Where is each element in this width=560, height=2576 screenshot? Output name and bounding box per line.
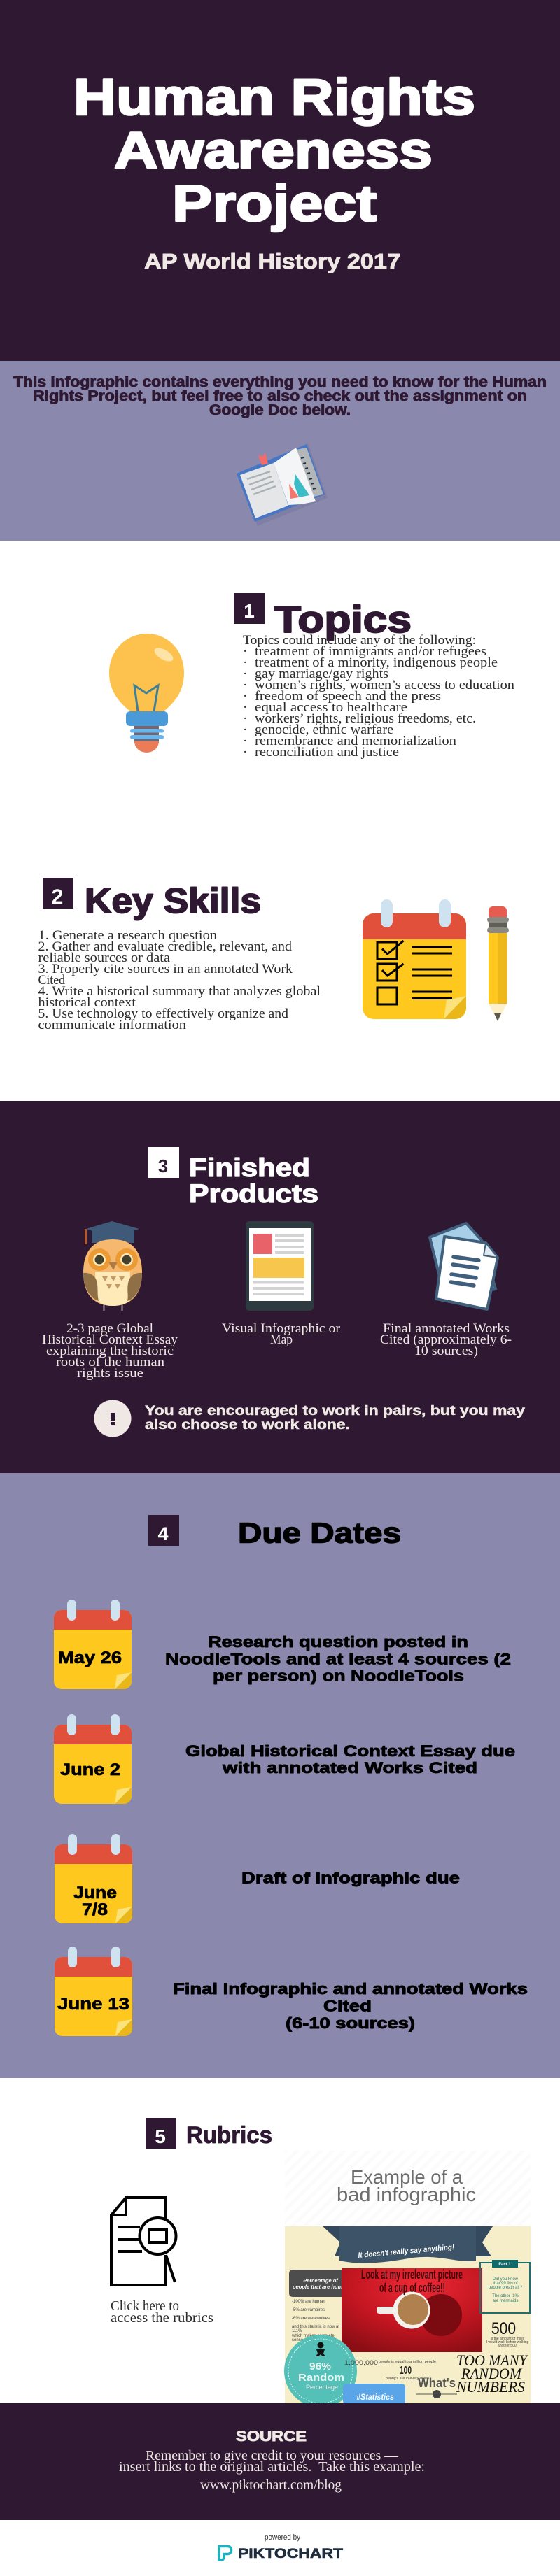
panel: due dates — [0, 1473, 560, 2078]
due item: research question: per person) on NoodleTools — [213, 1667, 464, 1684]
skills list: historical context — [38, 995, 136, 1010]
due item: draft: Draft of Infographic due — [241, 1869, 460, 1887]
topics list: genocide, ethnic warfare — [255, 723, 393, 737]
random numbers — [344, 2359, 457, 2398]
source text — [119, 2449, 425, 2493]
topics list: women’s rights, women’s access to education — [255, 678, 515, 692]
calendar: June 2: June 2 — [60, 1760, 120, 1779]
product captions: 10 sources) — [414, 1344, 478, 1358]
gray badge: people that are human — [292, 2284, 349, 2290]
calendar: June 7/8: June — [74, 1884, 117, 1902]
random numbers: penny's are in every dollar — [386, 2377, 429, 2381]
callout: pairs note: also choose to work alone. — [145, 1418, 350, 1432]
topics list: · — [243, 644, 247, 659]
heading: finished products: Products — [189, 1179, 318, 1208]
heading: finished products — [189, 1153, 318, 1208]
coffee photo — [342, 2268, 482, 2352]
icon: exclamation — [94, 1400, 132, 1437]
skills list: communicate information — [38, 1018, 187, 1032]
panel: introduction — [0, 361, 560, 541]
due item: context essay: with annotated Works Cited — [222, 1759, 477, 1777]
panel: key skills — [38, 878, 509, 1032]
skills list: reliable sources or data — [38, 951, 171, 965]
number badge 5 — [146, 2118, 176, 2149]
icon: owl with graduation cap — [83, 1221, 142, 1311]
number badge 5: 5 — [155, 2126, 166, 2147]
icon: open book — [237, 443, 328, 526]
skills list — [38, 928, 321, 1032]
number badge 2 — [43, 878, 74, 909]
stat 500: I would walk before walking — [486, 2340, 529, 2344]
example image: bad infographic: bad infographic — [337, 2184, 476, 2205]
too many random numbers: RANDOM — [461, 2365, 523, 2382]
fact box: Did you know — [493, 2277, 519, 2282]
heading: key skills: Key Skills — [85, 881, 261, 920]
topics list: · — [243, 689, 247, 704]
product captions: Map — [270, 1332, 293, 1347]
wordmark: PIKTOCHART — [238, 2547, 343, 2561]
topics list: remembrance and memorialization — [255, 734, 457, 748]
callout: pairs note: You are encouraged to work in pairs, but you may — [145, 1404, 526, 1418]
panel: finished products — [0, 1101, 560, 1473]
number badge 1: 1 — [244, 600, 255, 622]
link text: access the rubrics: Click here to — [111, 2299, 179, 2314]
icon: pencil — [487, 906, 509, 1021]
number badge 3: 3 — [158, 1155, 168, 1176]
icon: documents — [430, 1223, 498, 1309]
teal badge: 96% — [309, 2361, 331, 2372]
fact box: Fact 1 — [498, 2263, 511, 2267]
icon: tablet infographic — [246, 1221, 314, 1311]
left stats: and this statistic is now at — [292, 2325, 340, 2329]
coffee photo: of a cup of coffee!! — [379, 2281, 445, 2295]
due item: research question: NoodleTools and at least 4 sources (2 — [165, 1651, 511, 1667]
due item: final infographic — [173, 1980, 528, 2032]
product captions — [42, 1321, 512, 1381]
example image: bad infographic: Example of a — [351, 2166, 463, 2188]
due item: research question — [165, 1633, 511, 1684]
fact box — [480, 2260, 530, 2313]
stat 500: 500 — [491, 2319, 516, 2338]
callout: pairs note — [145, 1404, 526, 1432]
title — [74, 69, 475, 232]
random numbers: people is equal to a million people — [379, 2360, 436, 2364]
due item: final infographic: Cited — [323, 1998, 372, 2014]
calendar: May 26 — [54, 1600, 132, 1689]
heading: finished products: Finished — [189, 1153, 310, 1182]
left stats: -100% are human — [292, 2300, 326, 2304]
source text: Remember to give credit to your resources — — [146, 2449, 398, 2463]
left stats: -6% are werewolves — [292, 2317, 330, 2321]
footer: piktochart logo — [219, 2533, 343, 2561]
source text: insert links to the original articles. Take this example: — [119, 2460, 425, 2475]
calendar: June 13: June 13 — [57, 1995, 130, 2014]
product captions: Final annotated Works — [383, 1321, 510, 1336]
skills list: Cited — [38, 973, 65, 988]
intro text: This infographic contains everything you need to know for the Human — [13, 374, 547, 390]
intro text: Rights Project, but feel free to also check out the assignment on — [33, 388, 527, 404]
fact box: are mermaids — [493, 2299, 518, 2303]
title: Human Rights — [74, 69, 475, 126]
intro text: Google Doc below. — [209, 402, 351, 418]
topics list: · — [243, 700, 247, 715]
topics list: gay marriage/gay rights — [255, 667, 388, 681]
stat 500: another 500. — [498, 2344, 517, 2348]
topics list: reconciliation and justice — [255, 745, 399, 760]
source text: www.piktochart.com/blog — [200, 2478, 342, 2493]
product captions: roots of the human — [56, 1355, 165, 1369]
topics list: Topics could include any of the following: — [243, 633, 476, 648]
due item: context essay — [186, 1742, 515, 1777]
example image: bad infographic — [284, 2151, 531, 2407]
skills list: 1. Generate a research question — [38, 928, 218, 943]
link text: access the rubrics: access the rubrics — [111, 2311, 214, 2326]
icon: document with magnifier — [111, 2198, 176, 2285]
left stats: which makes complete — [291, 2334, 335, 2338]
due item: research question: Research question posted in — [208, 1633, 468, 1651]
left stats: sense... — [292, 2338, 307, 2342]
random numbers: 100 — [400, 2365, 412, 2377]
panel: header — [0, 0, 560, 361]
subtitle: AP World History 2017 — [144, 249, 400, 273]
teal badge: Percentage — [306, 2384, 338, 2391]
due item: final infographic: Final Infographic and annotated Works — [173, 1980, 528, 1998]
icon: piktochart mark — [219, 2546, 231, 2560]
topics list: treatment of a minority, indigenous people — [255, 655, 498, 670]
link text: access the rubrics — [111, 2299, 214, 2326]
banner — [323, 2226, 493, 2263]
skills list: 5. Use technology to effectively organize and — [38, 1006, 289, 1021]
topics list: treatment of immigrants and/or refugees — [255, 644, 486, 659]
too many random numbers — [456, 2351, 529, 2396]
too many random numbers: TOO MANY — [456, 2351, 529, 2369]
panel: source — [0, 2403, 560, 2520]
fact box: The other .1% — [492, 2294, 519, 2298]
topics list: · — [243, 745, 247, 760]
topics list: freedom of speech and the press — [255, 689, 441, 704]
topics list: · — [243, 655, 247, 670]
left stats: 111% — [292, 2329, 302, 2333]
calendar: June 7/8: 7/8 — [82, 1900, 108, 1919]
stat 500: is the amount of miles — [491, 2337, 525, 2341]
random numbers: What's — [418, 2376, 456, 2390]
fact box: that 99.9% of — [493, 2282, 518, 2286]
due item: context essay: Global Historical Context Essay due — [186, 1742, 515, 1760]
panel: rubrics — [111, 2118, 531, 2407]
blue badge: #Statistics — [356, 2392, 394, 2402]
topics list: equal access to healthcare — [255, 700, 407, 715]
gray badge — [289, 2270, 352, 2297]
icon: light bulb — [109, 634, 184, 753]
source heading: SOURCE — [236, 2428, 307, 2445]
calendar: May 26: May 26 — [58, 1649, 122, 1667]
gray badge: Percentage of — [303, 2277, 339, 2284]
number badge 2: 2 — [52, 885, 63, 909]
calendar: June 13 — [55, 1947, 132, 2036]
left stats — [291, 2300, 340, 2342]
blue badge — [343, 2384, 405, 2405]
product captions: explaining the historic — [46, 1344, 174, 1358]
calendar: June 7/8 — [55, 1834, 132, 1923]
footer: piktochart logo: powered by — [265, 2533, 300, 2542]
topics list: · — [243, 711, 247, 726]
stat 500 — [486, 2319, 529, 2348]
icon: checklist calendar — [363, 899, 466, 1019]
left stats: -5% are vampires — [292, 2308, 325, 2312]
teal badge: Random — [298, 2372, 344, 2384]
topics list: workers’ rights, religious freedoms, etc. — [255, 711, 476, 726]
random numbers: 1,000,000 — [344, 2359, 378, 2367]
topics list: · — [243, 723, 247, 737]
title: Project — [172, 176, 377, 232]
topics list — [243, 633, 515, 760]
number badge 4 — [148, 1515, 179, 1546]
title: Awareness — [114, 122, 433, 179]
calendar: June 2 — [54, 1714, 132, 1804]
heading: rubrics: Rubrics — [186, 2122, 272, 2149]
due item: final infographic: (6-10 sources) — [286, 2014, 415, 2032]
skills list: 2. Gather and evaluate credible, relevant, and — [38, 939, 293, 954]
skills list: 3. Properly cite sources in an annotated Work — [38, 962, 293, 976]
teal badge — [284, 2335, 357, 2407]
coffee photo: Look at my irrelevant picture — [361, 2268, 463, 2282]
number badge 3 — [148, 1147, 179, 1178]
product captions: 2-3 page Global — [66, 1321, 153, 1336]
number badge 4: 4 — [158, 1523, 169, 1544]
product captions: rights issue — [77, 1366, 144, 1381]
topics list: · — [243, 734, 247, 748]
skills list: 4. Write a historical summary that analyzes global — [38, 984, 321, 999]
number badge 1 — [234, 593, 265, 624]
product captions: Visual Infographic or — [222, 1321, 341, 1336]
too many random numbers: NUMBERS — [456, 2378, 525, 2396]
intro text — [13, 374, 547, 418]
banner: It doesn't really say anything! — [358, 2243, 455, 2260]
product captions: Cited (approximately 6- — [380, 1332, 512, 1347]
heading: due dates: Due Dates — [238, 1516, 401, 1549]
topics list: · — [243, 678, 247, 692]
panel: topics — [109, 593, 515, 760]
fact box: people breath air? — [489, 2286, 523, 2290]
topics list: · — [243, 667, 247, 681]
product captions: Historical Context Essay — [42, 1332, 178, 1347]
heading: topics: Topics — [274, 599, 412, 641]
